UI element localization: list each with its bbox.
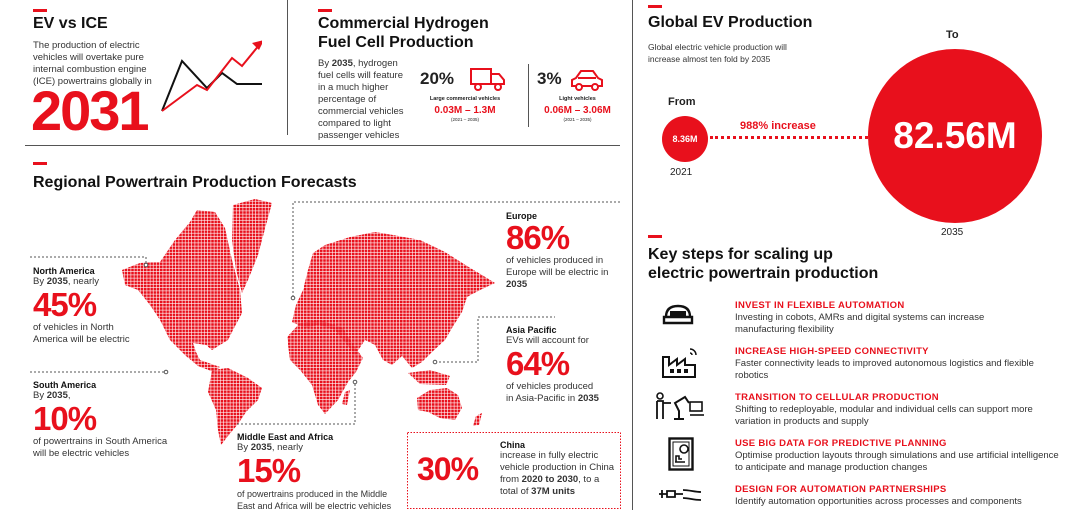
step 4: Optimise production layouts through simulations and use artificial intelligence to anticipate and manage production changes xyxy=(735,450,1059,473)
icon: data chart frame xyxy=(668,437,694,471)
North America xyxy=(122,210,242,372)
region: South America xyxy=(33,380,168,459)
Australia xyxy=(417,388,462,420)
step 5: DESIGN FOR AUTOMATION PARTNERSHIPS xyxy=(735,484,946,495)
region: Europe xyxy=(506,211,608,290)
label: To: To xyxy=(946,29,959,41)
region: China xyxy=(417,440,614,497)
icon: automation robot xyxy=(662,304,694,324)
heading: key steps: Key steps for scaling up xyxy=(648,246,833,263)
big circle 82.56M xyxy=(868,49,1042,223)
region: China: China xyxy=(500,440,525,450)
region: Europe: 86% xyxy=(506,219,569,256)
region: Asia Pacific: Asia Pacific xyxy=(506,325,557,335)
region: Europe: of vehicles produced in Europe will be electric in 2035 xyxy=(506,255,608,290)
step 1: Investing in cobots, AMRs and digital systems can increase manufacturing flexibility xyxy=(735,312,984,335)
region: North America: North America xyxy=(33,266,95,276)
heading: hydrogen xyxy=(318,15,489,51)
small circle 8.36M xyxy=(662,116,708,162)
heading: EV vs ICE: EV vs ICE xyxy=(33,15,108,32)
region: Europe: Europe xyxy=(506,211,537,221)
heading: Global EV: Global EV Production xyxy=(648,14,812,31)
region: Asia Pacific: EVs will account for xyxy=(506,335,589,346)
stat: light vehicles: (2021 – 2035) xyxy=(563,117,592,122)
heading: hydrogen: Fuel Cell Production xyxy=(318,34,474,51)
big circle 82.56M: 82.56M xyxy=(893,115,1017,156)
small circle 8.36M: 8.36M xyxy=(672,134,698,144)
heading: hydrogen: Commercial Hydrogen xyxy=(318,15,489,32)
chart: crossing lines xyxy=(161,40,262,112)
region: North America: of vehicles in North America will be electric xyxy=(33,322,130,345)
region: Asia Pacific: of vehicles produced in Asia-Pacific in 2035 xyxy=(506,381,599,404)
step 2 xyxy=(662,346,1034,381)
region: China: increase in fully electric vehicle production in China from 2020 to 2030, to a total of 37M units xyxy=(500,450,614,497)
region: China: 30% xyxy=(417,451,478,487)
stat: light vehicles: Light vehicles xyxy=(559,96,596,102)
Greenland xyxy=(232,199,272,293)
China box xyxy=(408,432,620,508)
region: Asia Pacific xyxy=(506,325,599,404)
big number 2031: 2031 xyxy=(31,79,148,142)
region: North America: By 2035, nearly xyxy=(33,276,99,287)
step 5: Identify automation opportunities across processes and components xyxy=(735,496,1022,507)
Africa xyxy=(287,320,363,414)
panel: Global EV Production: 988% increase xyxy=(740,120,816,132)
panel: Commercial Hydrogen Fuel Cell Production xyxy=(318,9,611,141)
step 2: INCREASE HIGH-SPEED CONNECTIVITY xyxy=(735,346,929,357)
region: South America: By 2035, xyxy=(33,390,71,401)
step 2: Faster connectivity leads to improved autonomous logistics and flexible robotics xyxy=(735,358,1034,381)
icon: connected factory xyxy=(662,348,697,378)
stat: light vehicles xyxy=(537,69,611,122)
step 4: USE BIG DATA FOR PREDICTIVE PLANNING xyxy=(735,438,947,449)
region: South America: South America xyxy=(33,380,96,390)
panel: Key steps xyxy=(648,235,1059,507)
icon: robot arm line xyxy=(659,489,701,501)
region: North America: 45% xyxy=(33,286,96,323)
South America xyxy=(208,368,262,445)
stat: large commercial vehicles: Large commercial vehicles xyxy=(430,96,500,102)
step 1: INVEST IN FLEXIBLE AUTOMATION xyxy=(735,300,904,311)
panel: Global EV Production: 2021 xyxy=(670,167,692,178)
region: Middle East and Africa xyxy=(237,432,391,511)
region: Middle East and Africa: 15% xyxy=(237,452,300,489)
region: South America: of powertrains in South America will be electric vehicles xyxy=(33,436,167,459)
region: Middle East and Africa: of powertrains produced in the Middle East and Africa will be electric vehicles xyxy=(237,489,391,511)
Europe & Asia xyxy=(292,232,495,368)
stat: large commercial vehicles: (2021 – 2035) xyxy=(451,117,479,122)
panel: Global EV Production xyxy=(648,5,1042,238)
text: global description: Global electric vehicle production will increase almost ten fold by 2035 xyxy=(648,42,787,64)
text: hydrogen description: By 2035, hydrogen fuel cells will feature in a much higher percentage of commercial vehicles compared to light passenger vehicles xyxy=(318,58,404,141)
stat: large commercial vehicles: 20% xyxy=(420,69,454,88)
icon: truck xyxy=(470,68,505,91)
icon: car xyxy=(571,70,603,91)
South East Asia islands xyxy=(408,370,450,385)
panel: Regional Powertrain Production Forecasts xyxy=(33,162,357,191)
connector lines xyxy=(30,202,620,424)
step 3: TRANSITION TO CELLULAR PRODUCTION xyxy=(735,392,939,403)
text: EV vs ICE description: The production of electric vehicles will overtake pure internal combustion engine (ICE) powertrains globally in xyxy=(33,40,152,87)
stat: light vehicles: 3% xyxy=(537,69,562,88)
region: North America xyxy=(33,266,130,345)
region: South America: 10% xyxy=(33,400,96,437)
stat: large commercial vehicles xyxy=(420,68,505,122)
label: From: From xyxy=(668,96,696,108)
icon: person, robot arm, screen xyxy=(656,392,704,420)
stat: light vehicles: 0.06M – 3.06M xyxy=(544,105,611,116)
region: Asia Pacific: 64% xyxy=(506,345,569,382)
stat: large commercial vehicles: 0.03M – 1.3M xyxy=(434,105,496,116)
heading: key steps xyxy=(648,246,878,282)
panel: Global EV Production: 2035 xyxy=(941,227,963,238)
dividers xyxy=(287,0,288,135)
world map xyxy=(30,199,621,509)
step 4 xyxy=(668,437,1059,473)
step 3 xyxy=(656,392,1033,427)
panel: EV vs ICE xyxy=(31,9,262,142)
step 3: Shifting to redeployable, modular and individual cells can support more variation in products and supply xyxy=(735,404,1033,427)
dotted link & increase label xyxy=(710,136,868,139)
region: Middle East and Africa: By 2035, nearly xyxy=(237,442,303,453)
heading: key steps: electric powertrain production xyxy=(648,265,878,282)
step 5 xyxy=(659,484,1022,507)
step 1 xyxy=(662,300,984,335)
region: Middle East and Africa: Middle East and Africa xyxy=(237,432,333,442)
heading: regional: Regional Powertrain Production Forecasts xyxy=(33,174,357,191)
Madagascar xyxy=(342,390,350,405)
